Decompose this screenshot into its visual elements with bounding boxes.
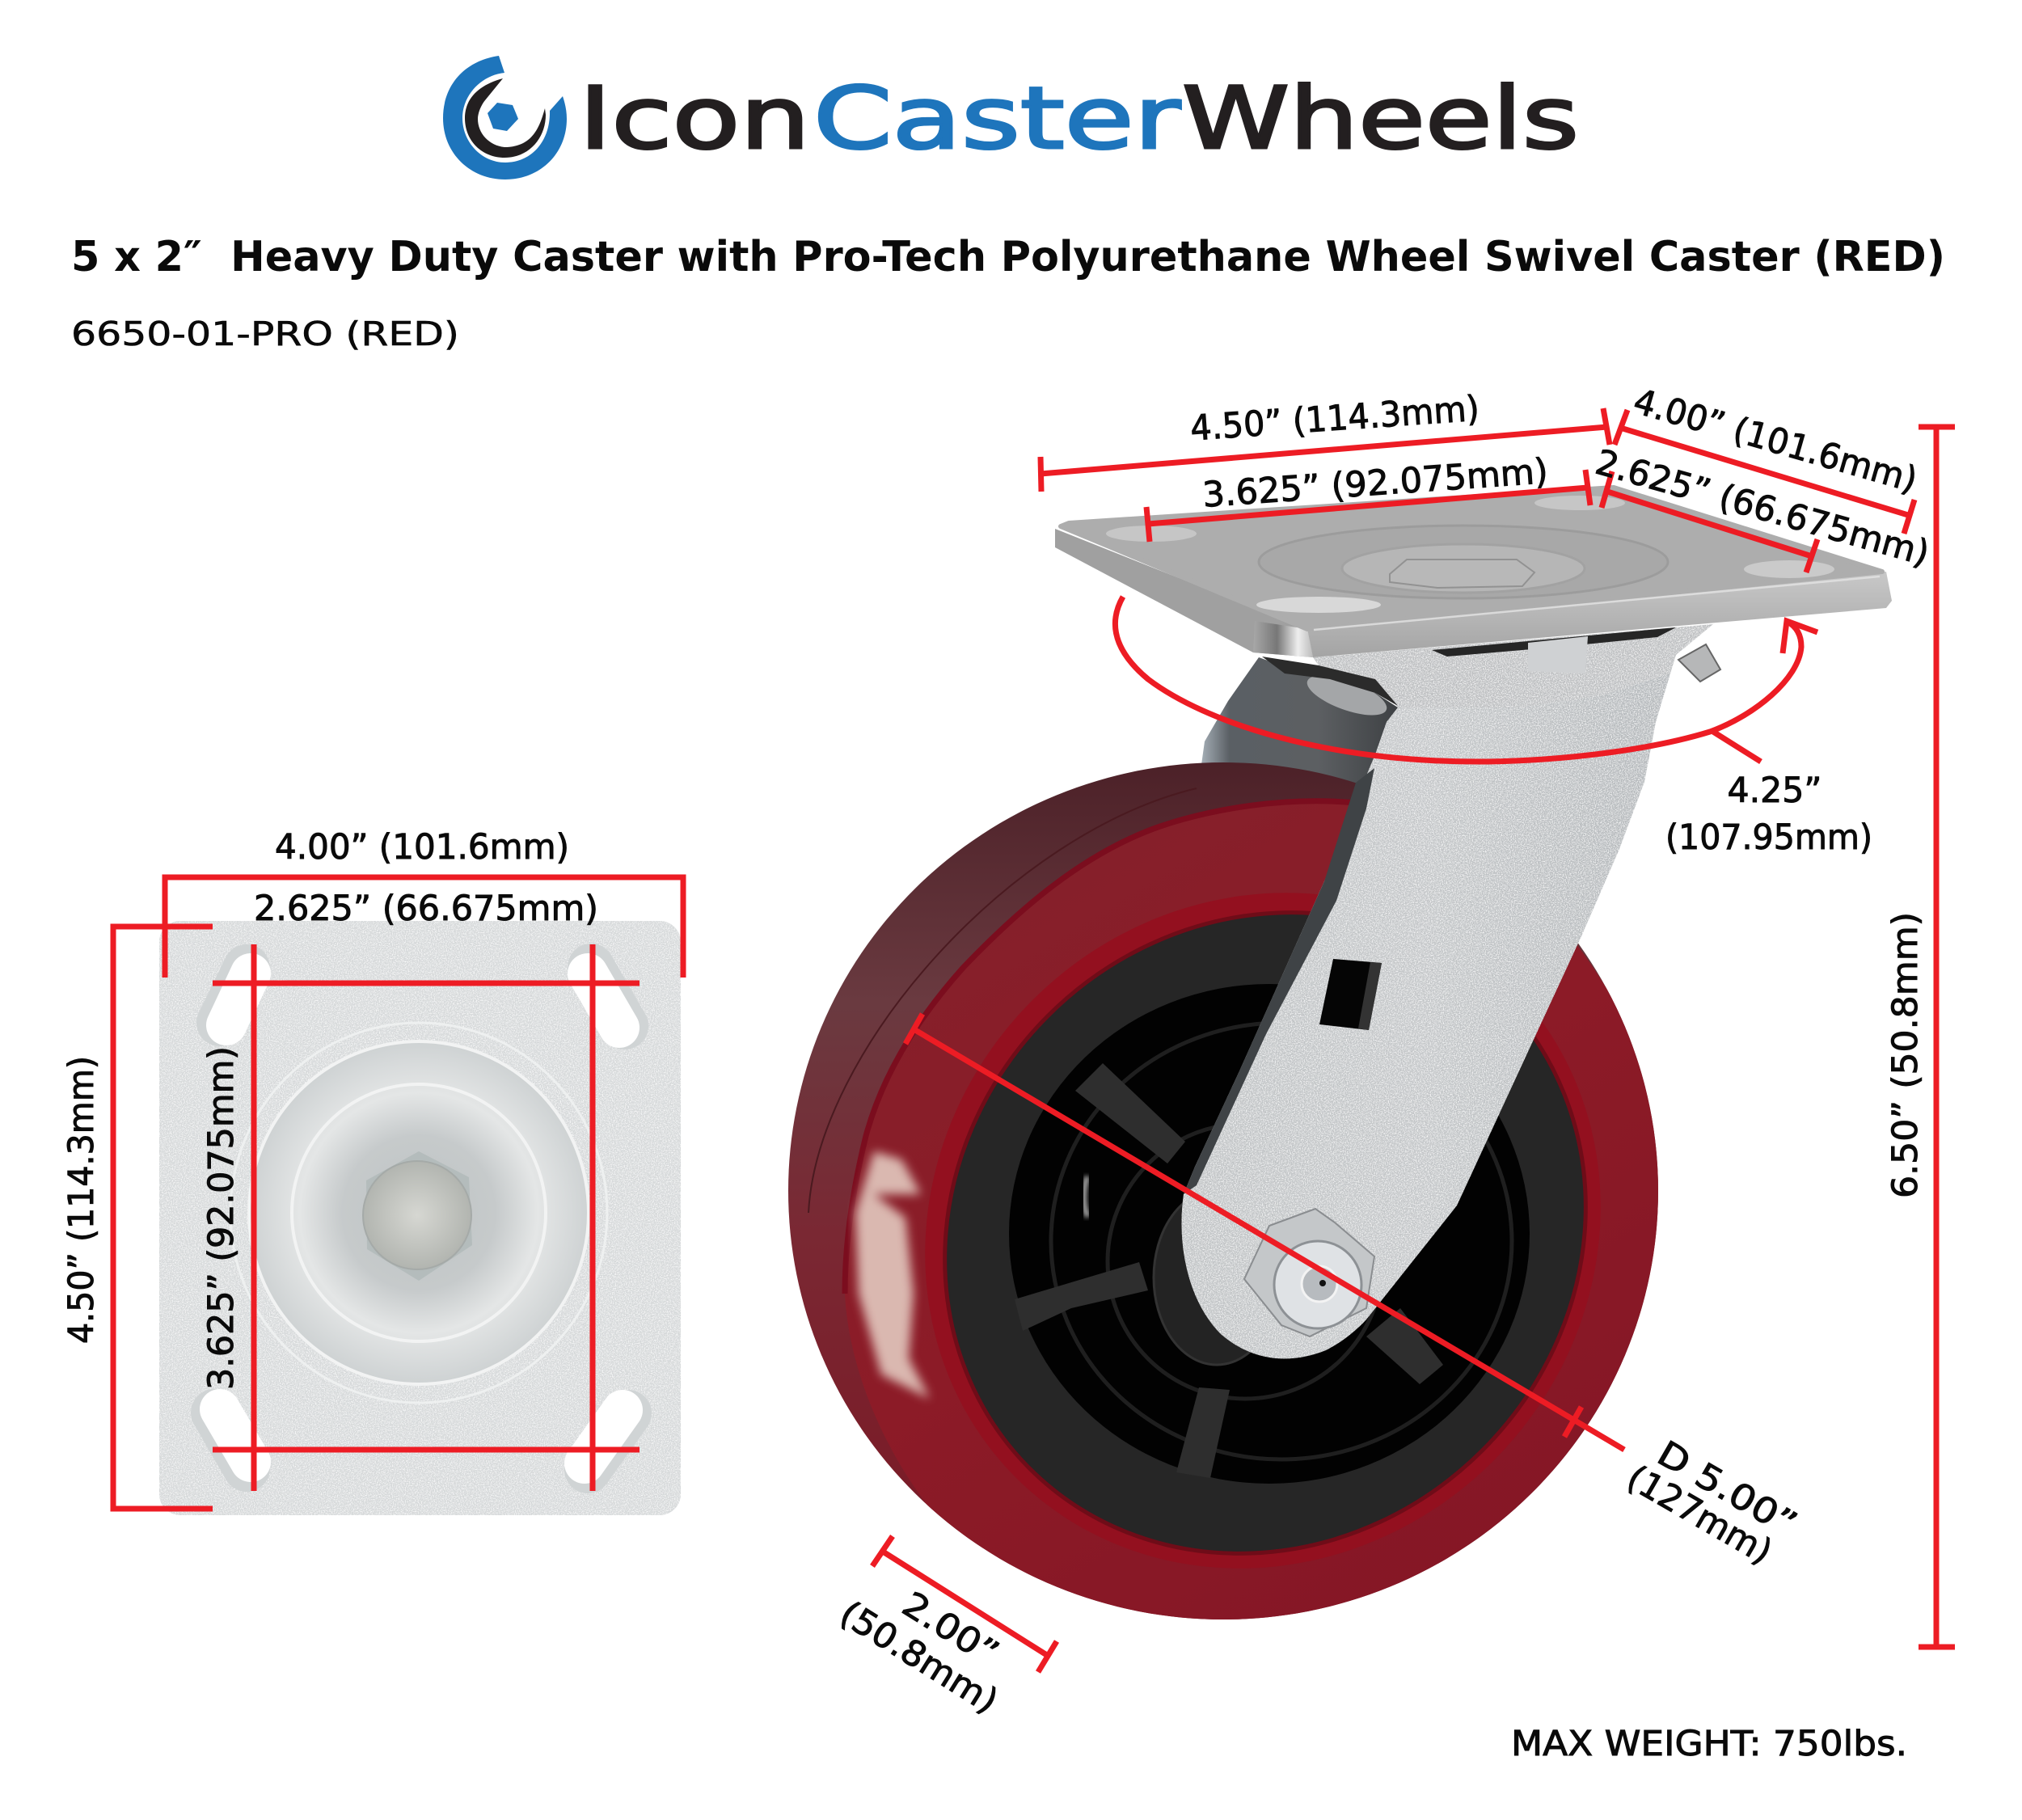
grease zerk — [1678, 644, 1720, 682]
label: hole spacing length: 3.625” (92.075mm) — [1201, 451, 1549, 516]
wheel — [788, 762, 1658, 1619]
axle nut — [1244, 1209, 1374, 1336]
fork dark edge — [1184, 768, 1374, 1194]
tyre upper ridge — [845, 801, 1356, 1294]
dimension brackets — [113, 877, 683, 1509]
label: swivel radius: 4.25” — [1727, 771, 1822, 811]
label: wheel diameter: D 5.00” — [1650, 1434, 1804, 1545]
label: wheel width: 2.00” — [895, 1584, 1006, 1674]
label: plate length: 4.50” (114.3mm) — [1189, 389, 1480, 449]
label: plate width: 4.00” (101.6mm) — [275, 827, 569, 868]
rotation arc — [1115, 597, 1817, 762]
center bolt — [363, 1151, 472, 1281]
logo word: Caster: Caster — [813, 69, 1181, 168]
plate rings — [230, 1023, 607, 1403]
plate top face — [1061, 488, 1882, 629]
label: hole spacing length: 3.625” (92.075mm) — [201, 1046, 242, 1390]
top bolt — [1390, 560, 1534, 588]
slotted mounting holes — [214, 967, 628, 1470]
hub well — [1009, 984, 1530, 1484]
edge highlight — [1314, 576, 1880, 630]
plate holes — [1106, 496, 1834, 613]
rim ring — [786, 754, 1740, 1708]
label: overall height: 6.50” (50.8mm) — [1885, 912, 1926, 1198]
panel: swivel caster photo — [786, 382, 1955, 1722]
label: swivel radius metric: (107.95mm) — [1665, 817, 1872, 858]
rear fork leg — [1200, 657, 1398, 817]
panel: top plate view — [61, 827, 683, 1515]
hub glint — [1084, 1176, 1088, 1217]
logo: Icon Caster Wheels — [443, 56, 1579, 179]
label: plate width: 4.00” (101.6mm) — [1629, 382, 1922, 500]
logo word: Icon: Icon — [579, 69, 810, 168]
label: wheel diameter metric: (127mm) — [1620, 1458, 1779, 1573]
tread groove — [808, 788, 1197, 1213]
corner bevel — [1253, 621, 1313, 657]
fork slot — [1319, 959, 1382, 1030]
swivel housing — [1262, 624, 1713, 707]
spokes — [1015, 1063, 1443, 1478]
plate rings — [1259, 526, 1668, 598]
icon: blue ring — [443, 56, 567, 179]
front fork — [1181, 674, 1670, 1358]
mounting plate — [159, 921, 681, 1515]
part number: 6650-01-PRO (RED) — [71, 315, 459, 353]
title: 5 x 2″ Heavy Duty Caster with Pro-Tech Polyurethane Wheel Swivel Caster (RED) — [71, 233, 1945, 281]
icon: black crescent — [465, 78, 546, 158]
label: hole spacing width: 2.625” (66.675mm) — [254, 889, 598, 929]
tyre highlight — [855, 1151, 930, 1399]
label: wheel width metric: (50.8mm) — [833, 1594, 1005, 1722]
black hub — [813, 780, 1718, 1686]
max weight note: MAX WEIGHT: 750lbs. — [1511, 1724, 1907, 1764]
logo word: Wheels: Wheels — [1182, 69, 1579, 168]
dimension lines — [872, 408, 1955, 1672]
caster top plate — [1055, 488, 1892, 657]
label: plate length: 4.50” (114.3mm) — [61, 1056, 102, 1344]
axle housing — [1154, 1190, 1280, 1365]
label: hole spacing width: 2.625” (66.675mm) — [1591, 442, 1934, 574]
tread — [788, 762, 1658, 1619]
icon: blue hexagon bolt — [488, 103, 518, 131]
grease fitting — [1274, 1241, 1361, 1328]
hub inner rings — [1051, 1023, 1512, 1459]
plate edges — [1055, 529, 1313, 657]
tyre face — [845, 801, 1674, 1649]
